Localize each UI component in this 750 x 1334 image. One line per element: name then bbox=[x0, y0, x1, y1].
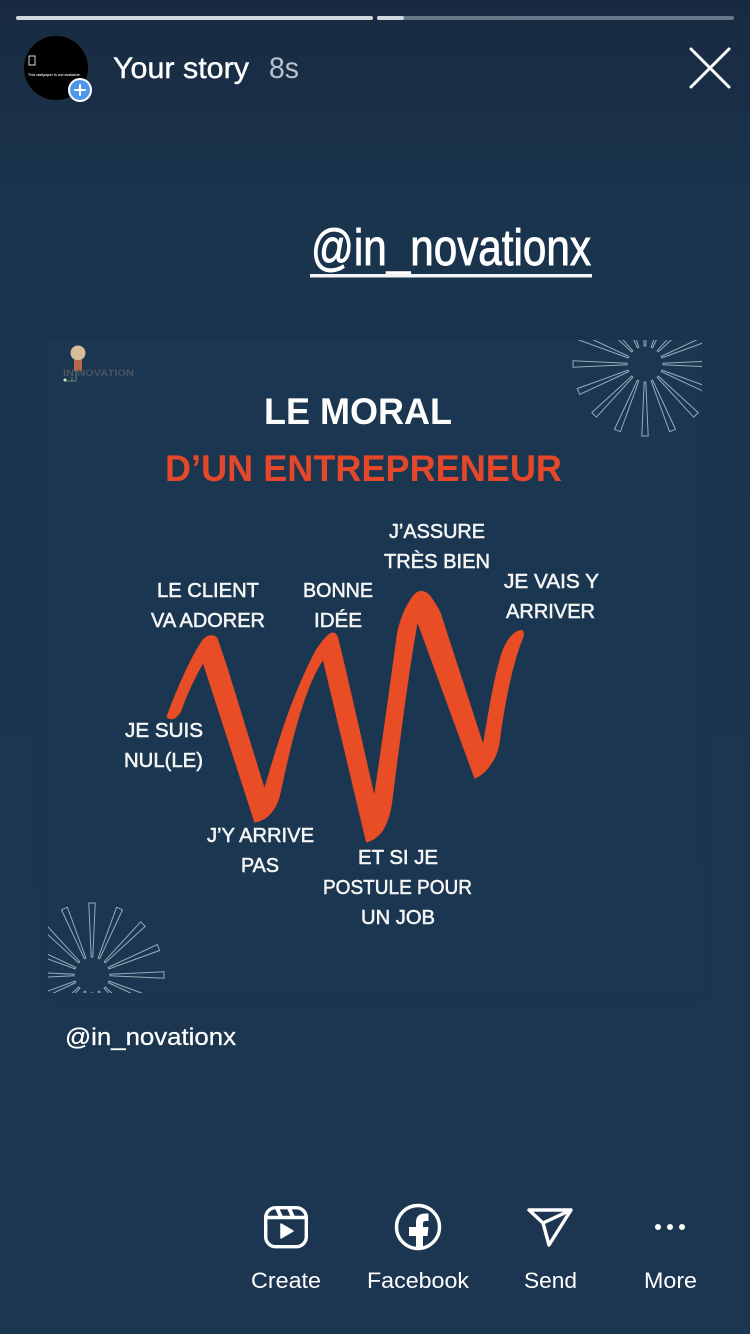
label: je vais y arriver bbox=[504, 571, 599, 623]
label: je suis nul: JE SUIS bbox=[125, 720, 203, 742]
icon: close bbox=[691, 49, 729, 87]
label: et si je postule: UN JOB bbox=[361, 907, 435, 929]
story username: Your story bbox=[113, 52, 249, 85]
label: j'y arrive pas: J’Y ARRIVE bbox=[207, 825, 314, 847]
subtitle: D’UN ENTREPRENEUR bbox=[165, 448, 562, 489]
label: j'y arrive pas bbox=[207, 825, 314, 877]
label: le client va adorer: LE CLIENT bbox=[157, 580, 259, 602]
action: more bbox=[644, 1224, 697, 1293]
action: more: More bbox=[644, 1268, 697, 1293]
label: bonne idee: BONNE bbox=[303, 580, 373, 602]
avatar with add badge bbox=[24, 36, 92, 102]
title: LE MORAL bbox=[264, 391, 452, 432]
icon: dots bbox=[655, 1224, 685, 1230]
action: create: Create bbox=[251, 1268, 321, 1293]
label: et si je postule bbox=[323, 847, 472, 929]
label: bonne idee: IDÉE bbox=[314, 609, 362, 632]
handle sticker: @in_novationx bbox=[311, 219, 591, 276]
logo: IN NOVATION bbox=[63, 368, 134, 379]
action: facebook: Facebook bbox=[367, 1268, 470, 1293]
logo bbox=[63, 346, 134, 382]
icon: paper plane bbox=[529, 1210, 571, 1245]
label: j'assure: J’ASSURE bbox=[389, 521, 485, 543]
label: je suis nul: NUL(LE) bbox=[124, 750, 203, 772]
action: send bbox=[524, 1210, 577, 1293]
mood curve bbox=[167, 592, 523, 842]
label: j'y arrive pas: PAS bbox=[241, 855, 279, 877]
label: bonne idee bbox=[303, 580, 373, 632]
label: j'assure: TRÈS BIEN bbox=[384, 550, 490, 573]
panel: post card bbox=[48, 340, 702, 993]
decorative burst bottom left bbox=[48, 902, 164, 993]
action: facebook bbox=[367, 1206, 470, 1293]
story age: 8s bbox=[269, 52, 299, 85]
label: j'assure bbox=[384, 521, 490, 573]
label: et si je postule: ET SI JE bbox=[358, 847, 438, 869]
caption handle: @in_novationx bbox=[65, 1024, 236, 1051]
story progress bars bbox=[16, 16, 734, 20]
label: je suis nul bbox=[124, 720, 203, 772]
icon: reels bbox=[266, 1208, 306, 1247]
action: send: Send bbox=[524, 1268, 577, 1293]
card shadow bbox=[48, 340, 702, 993]
decorative burst top right bbox=[572, 340, 702, 436]
label: je vais y arriver: ARRIVER bbox=[506, 601, 595, 623]
label: je vais y arriver: JE VAIS Y bbox=[504, 571, 599, 593]
label: le client va adorer: VA ADORER bbox=[151, 610, 265, 632]
avatar with add badge: This wallpaper is not available bbox=[28, 73, 80, 77]
icon: facebook bbox=[396, 1206, 440, 1250]
action: create bbox=[251, 1208, 321, 1293]
label: et si je postule: POSTULE POUR bbox=[323, 877, 472, 899]
label: le client va adorer bbox=[151, 580, 265, 632]
